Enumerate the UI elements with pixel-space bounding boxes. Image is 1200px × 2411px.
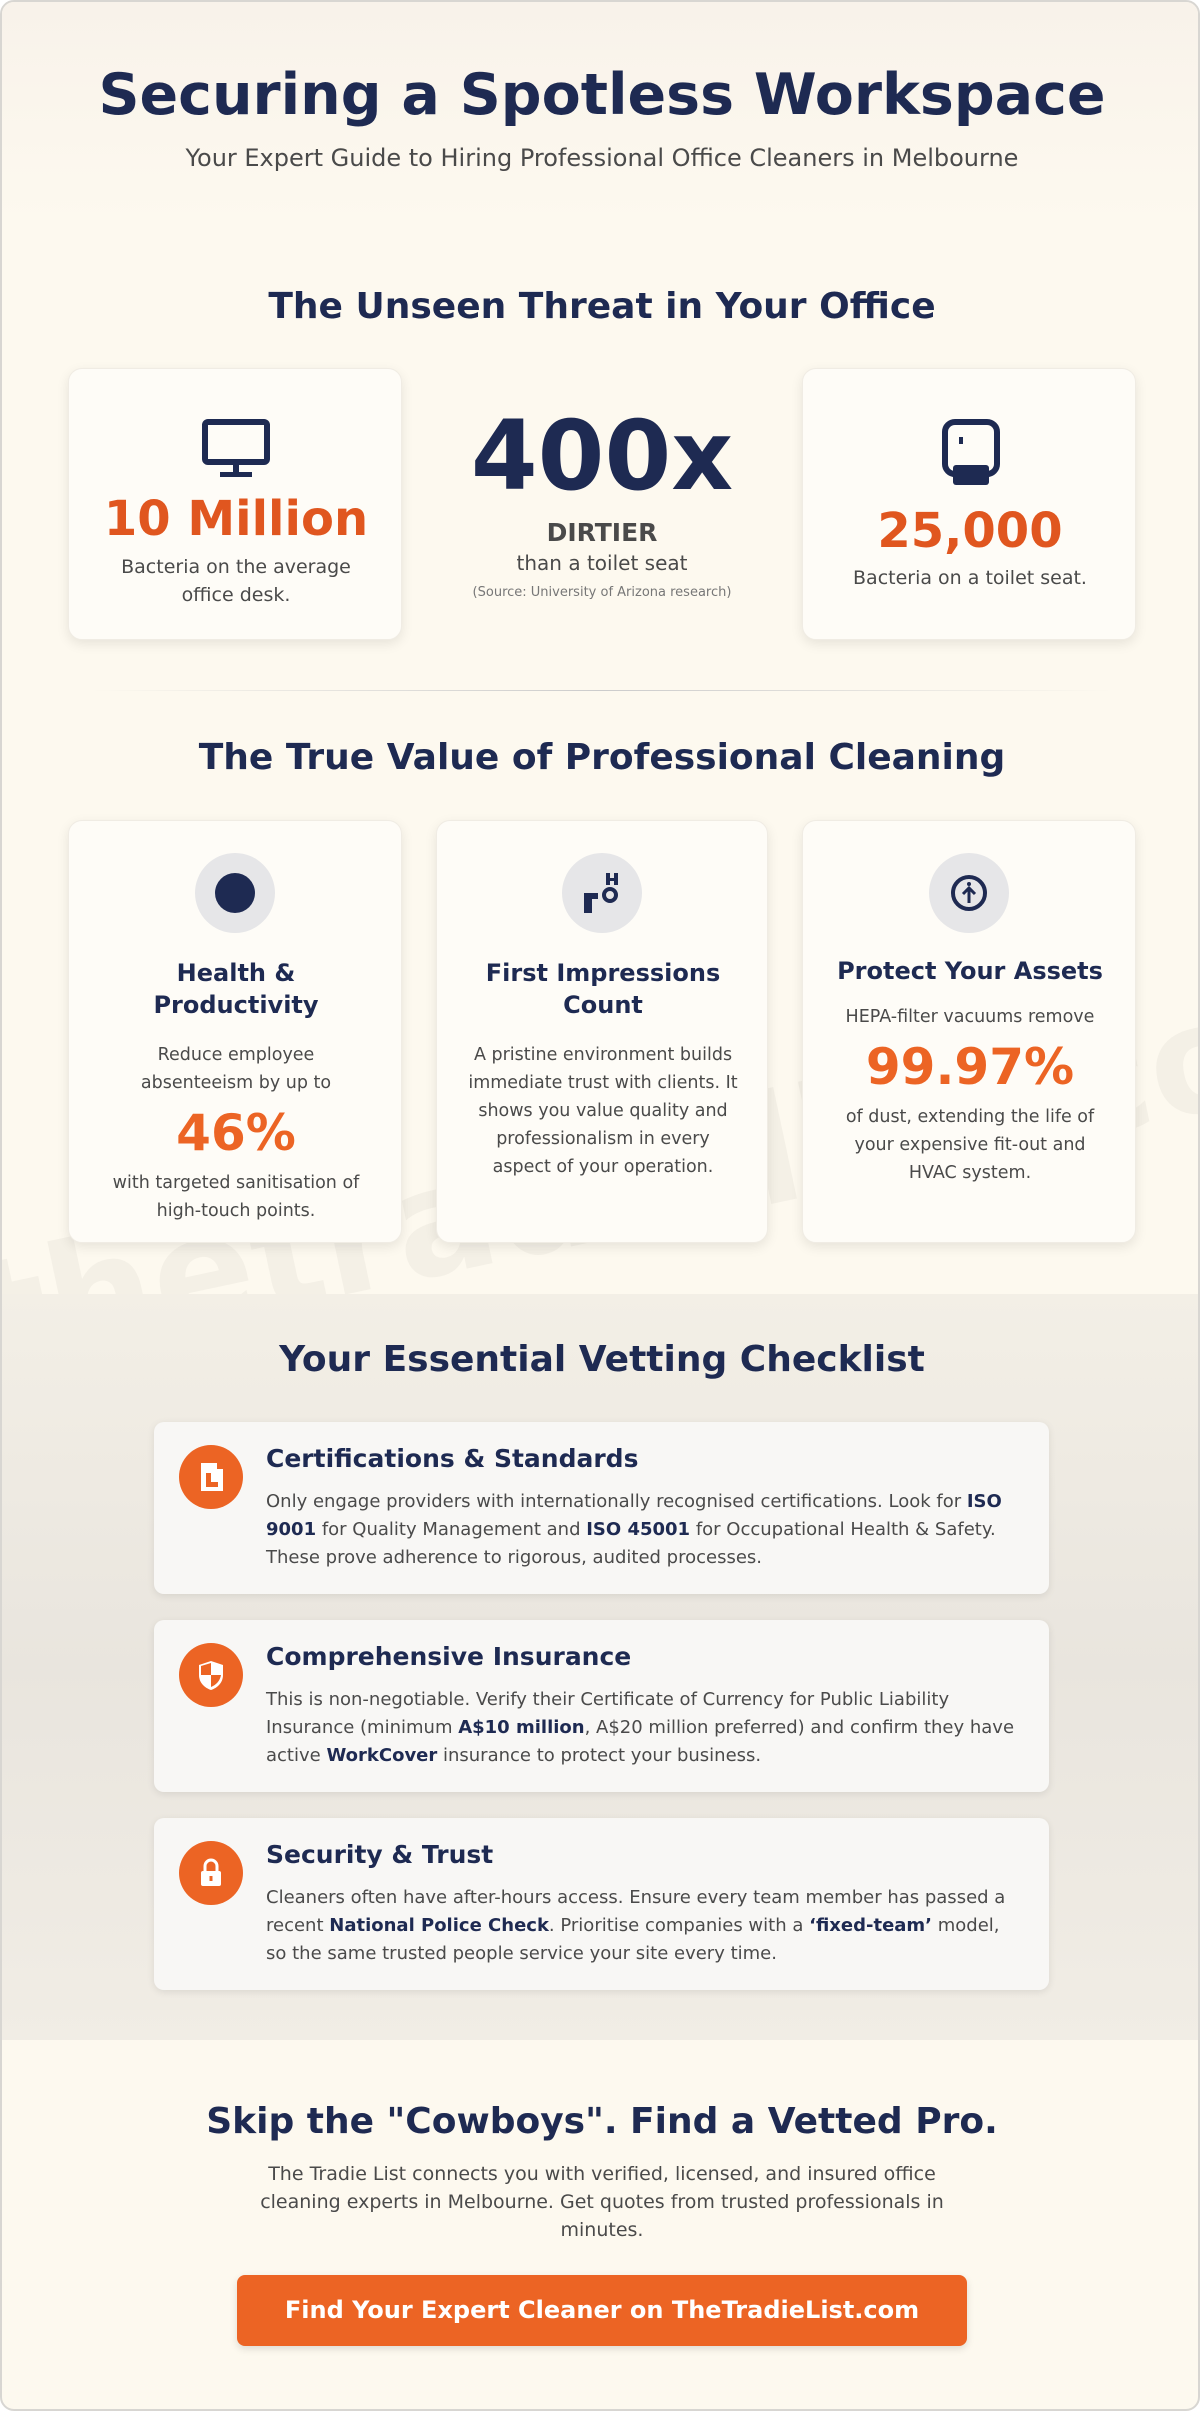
CTA heading: Skip the "Cowboys". Find a Vetted Pro. [206, 2101, 998, 2142]
card text: A pristine environment builds immediate trust with clients. It shows you value quality and professionalism in every aspect of your operation. [468, 1045, 738, 1177]
check: certifications: Certifications & Standards [266, 1444, 638, 1473]
CTA button [237, 2275, 967, 2346]
icon: shield [179, 1643, 243, 1707]
check: security: Security & Trust [266, 1840, 493, 1869]
icon: lock [179, 1841, 243, 1905]
card text: 46% [176, 1104, 296, 1162]
stat: 25,000: 25,000 [877, 503, 1063, 559]
heading: checklist: Your Essential Vetting Checklist [279, 1339, 925, 1380]
stat: 400x: DIRTIER [547, 518, 657, 547]
stat: 10 million: 10 Million [104, 491, 368, 547]
card text: absenteeism by up to with targeted sanitisation of high-touch points. [113, 1073, 359, 1221]
check: insurance [154, 1620, 1049, 1792]
check: security: Cleaners often have after-hours access. Ensure every team member has passed a recent National Police Check. Prioritise companies with a ‘fixed-team’ model, so the same trusted people service your site every time. [266, 1887, 1005, 1964]
icon: dot [195, 853, 275, 933]
card text: Reduce employee [158, 1045, 314, 1065]
card: protect assets [802, 820, 1136, 1243]
heading: unseen threat: The Unseen Threat in Your Office [268, 286, 936, 327]
stat: 400x [471, 400, 733, 600]
check: security [154, 1818, 1049, 1990]
subtitle: Your Expert Guide to Hiring Professional Office Cleaners in Melbourne [186, 144, 1018, 172]
stat: 400x: than a toilet seat [517, 551, 687, 575]
card: 25,000 [802, 368, 1136, 640]
card: health [68, 820, 402, 1243]
card text: 99.97% [866, 1038, 1074, 1096]
card: 10 million [68, 368, 402, 640]
header background [2, 2, 1200, 222]
card title: Health & [177, 959, 295, 987]
icon: certificate [179, 1445, 243, 1509]
stat: 400x: 400x [471, 400, 733, 512]
card title: Protect Your Assets [837, 957, 1103, 985]
card: first impressions [436, 820, 768, 1243]
card text: HEPA-filter vacuums remove of dust, extending the life of your expensive fit-out and HVAC system. [846, 1007, 1094, 1183]
check: insurance: Comprehensive Insurance [266, 1642, 631, 1671]
card title: Productivity [153, 991, 319, 1019]
section: checklist [2, 1294, 1200, 2040]
icon: up arrow circle [929, 853, 1009, 933]
CTA button: Find Your Expert Cleaner on TheTradieList.com [285, 2296, 919, 2324]
card title [153, 959, 319, 1019]
check: insurance: This is non-negotiable. Verify their Certificate of Currency for Public Liability Insurance (minimum A$10 million, A$20 million preferred) and confirm they have active WorkCover insurance to protect your business. [266, 1689, 1014, 1766]
check: certifications: Only engage providers with internationally recognised certifications. Look for ISO 9001 for Quality Management and ISO 45001 for Occupational Health & Safety. These prove adherence to rigorous, audited processes. [266, 1491, 1002, 1568]
title: Securing a Spotless Workspace [98, 62, 1106, 128]
CTA text: The Tradie List connects you with verified, licensed, and insured office cleaning experts in Melbourne. Get quotes from trusted professionals in minutes. [260, 2163, 944, 2241]
icon: toilet [942, 419, 1000, 485]
heading: true value: The True Value of Professional Cleaning [199, 737, 1005, 778]
card title: First Impressions [486, 959, 720, 987]
check: certifications [154, 1422, 1049, 1594]
stat: 400x: (Source: University of Arizona research) [473, 585, 731, 600]
icon: monitor [202, 419, 270, 477]
card title [486, 959, 720, 1019]
text: Bacteria on the average office desk. [121, 556, 351, 606]
card title: Count [563, 991, 643, 1019]
divider [92, 690, 1112, 691]
text: Bacteria on a toilet seat. [853, 567, 1087, 589]
icon: handshake [562, 853, 642, 933]
